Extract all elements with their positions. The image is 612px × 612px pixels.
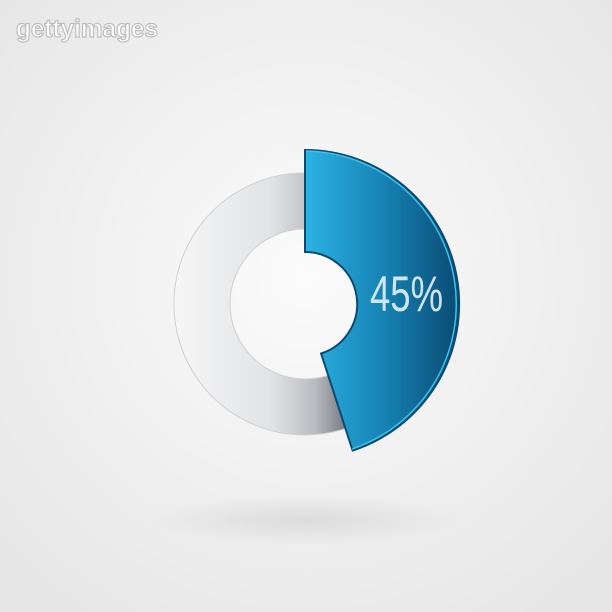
label 45%: 45% bbox=[370, 266, 443, 322]
donut chart bbox=[174, 150, 459, 451]
watermark: gettyimages bbox=[16, 15, 158, 43]
shadow bbox=[145, 494, 465, 546]
blue slice 45% bbox=[305, 150, 459, 451]
outer light edge bbox=[306, 151, 456, 449]
grey ring bbox=[174, 173, 436, 435]
